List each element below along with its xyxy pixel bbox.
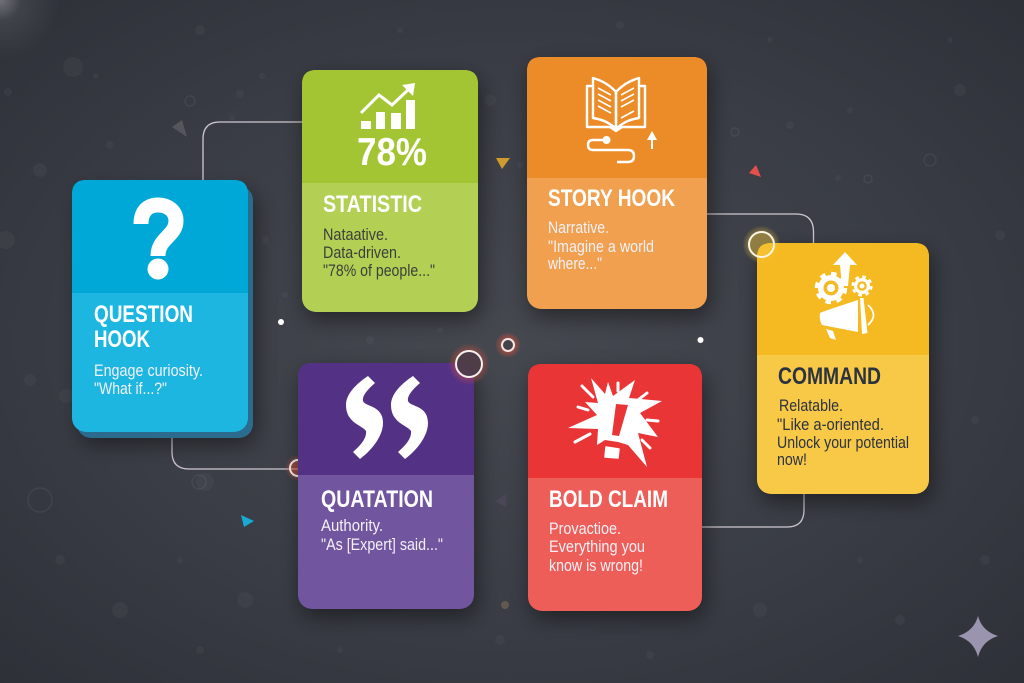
connector: question to statistic xyxy=(203,122,302,180)
description: story hook: Narrative. xyxy=(548,219,609,237)
description: third line: where..." xyxy=(547,255,602,273)
heading: quotation: QUATATION xyxy=(321,486,433,513)
description: question hook: Engage curiosity. xyxy=(94,362,203,380)
dot: left white xyxy=(278,319,284,325)
node: small red ring xyxy=(495,332,521,358)
icon: question mark xyxy=(141,205,176,280)
heading: question hook: QUESTION xyxy=(94,301,193,328)
triangle: cyan xyxy=(241,515,254,527)
card: question hook xyxy=(72,180,256,444)
heading: story hook: STORY HOOK xyxy=(548,185,676,212)
description: third line: know is wrong! xyxy=(549,557,643,575)
icon: gears, arrow and megaphone xyxy=(816,252,874,340)
description: command: Relatable. xyxy=(779,397,843,415)
card: quotation xyxy=(298,363,477,617)
card: story hook xyxy=(527,57,710,317)
description: quotation: Authority. xyxy=(321,517,383,535)
triangle: faint purple xyxy=(495,494,506,507)
card: command xyxy=(757,243,932,502)
triangle: red xyxy=(749,165,761,177)
description: second line: Data-driven. xyxy=(323,244,401,262)
heading: statistic: STATISTIC xyxy=(323,191,422,218)
node: ring behind quotation card xyxy=(285,455,311,481)
heading: command: COMMAND xyxy=(778,363,881,390)
icon: quotation marks xyxy=(346,376,428,459)
sparkle star xyxy=(958,616,998,657)
node: yellow ring xyxy=(742,226,780,264)
icon: rising bar chart xyxy=(361,83,415,129)
card: bold claim xyxy=(528,364,705,619)
description: bold claim: Provactioe. xyxy=(549,520,621,538)
description: second line: Everything you xyxy=(549,538,645,556)
stat: 78 percent: 78% xyxy=(357,131,427,174)
description: statistic: Nataative. xyxy=(323,226,388,244)
icon: burst with exclamation mark xyxy=(568,378,662,467)
description: second line: "Imagine a world xyxy=(548,238,654,256)
description: second line: "As [Expert] said..." xyxy=(321,536,443,554)
dot: right white xyxy=(698,337,704,343)
connector: question to quotation xyxy=(172,432,298,469)
description: second line: "What if...?" xyxy=(94,380,167,398)
heading: bold claim: BOLD CLAIM xyxy=(549,486,668,513)
triangle: yellow xyxy=(496,158,510,169)
icon: open book and path xyxy=(587,78,657,162)
card: statistic xyxy=(302,70,481,320)
description: third line: "78% of people..." xyxy=(323,262,435,280)
connector: story to command xyxy=(707,214,814,243)
description: fourth line: now! xyxy=(777,451,807,469)
description: third line: Unlock your potential xyxy=(777,434,909,452)
heading: second line: HOOK xyxy=(94,326,151,353)
description: second line: "Like a-oriented. xyxy=(777,416,884,434)
triangle: grey xyxy=(172,120,187,137)
node: large red ring xyxy=(448,343,490,385)
connector: bold claim to command xyxy=(702,494,804,527)
